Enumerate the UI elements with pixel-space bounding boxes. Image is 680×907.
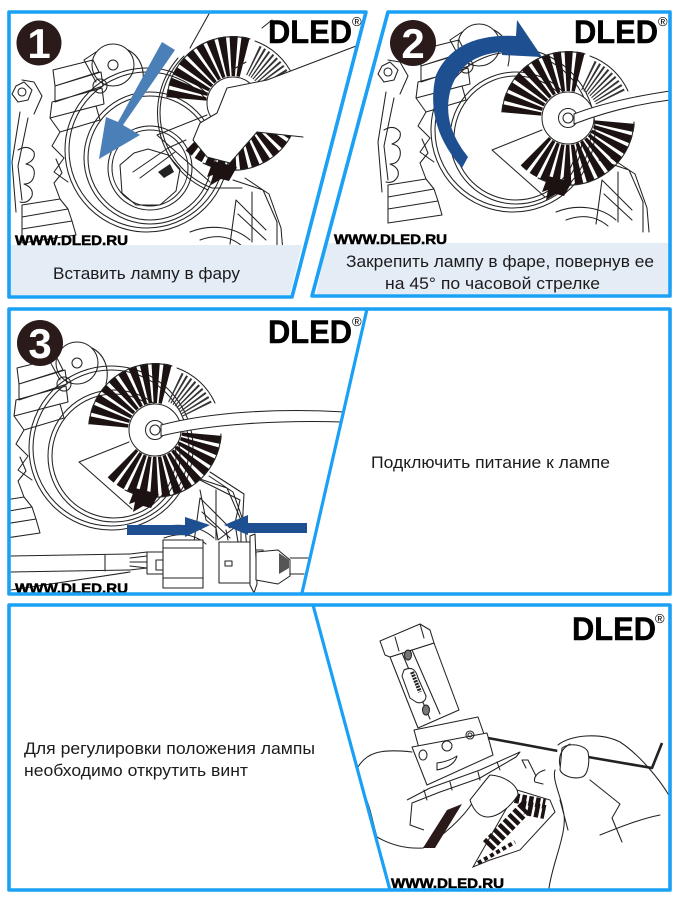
panel frame [312, 12, 670, 296]
step badge 1 [16, 20, 62, 67]
connector: right plug with cable [219, 534, 308, 593]
panel frame [9, 12, 366, 297]
arrow: insert lamp [99, 42, 175, 159]
description text: Подключить питание к лампе [371, 454, 610, 472]
logo: ® [655, 611, 665, 626]
panel frame [9, 605, 670, 890]
website label: WWW.DLED.RU [391, 876, 504, 891]
panel: step 4 [9, 605, 672, 891]
illustration: adjusting lamp with hex key [358, 624, 672, 888]
logo: ® [352, 14, 362, 29]
logo: ® [352, 314, 362, 329]
illustration: lamp turned in headlight [378, 24, 670, 232]
description text: Для регулировки положения лампы [24, 740, 315, 758]
fingers [470, 775, 518, 817]
caption text: Закрепить лампу в фаре, повернув ее [346, 253, 654, 271]
hex key: long end [588, 743, 662, 768]
step badge 1: 1 [27, 20, 51, 67]
arrow: from left to connector [127, 517, 210, 537]
logo: DLED [572, 611, 656, 647]
lamp base [412, 717, 493, 785]
diagonal divider [313, 605, 390, 890]
hex key: short end [488, 738, 558, 751]
website label: WWW.DLED.RU [334, 232, 447, 247]
connector: left plug [147, 540, 203, 588]
caption band [316, 243, 668, 294]
logo: DLED [268, 14, 352, 50]
panel: step 1 [9, 12, 367, 297]
diagonal divider [302, 309, 367, 593]
caption band [10, 245, 302, 295]
arrow: from right to connector [224, 515, 307, 535]
caption text [346, 253, 654, 293]
step badge 2: 2 [401, 20, 425, 67]
logo: DLED [268, 314, 352, 350]
left hand [358, 751, 473, 848]
panel: step 3 [0, 309, 670, 596]
description text [24, 740, 315, 780]
heatsink fragments [423, 790, 555, 867]
step badge 3: 3 [28, 320, 52, 367]
panel: step 2 [312, 12, 670, 296]
lamp head [380, 624, 459, 728]
logo: DLED [574, 14, 658, 50]
step badge 2 [390, 20, 436, 67]
caption text: на 45° по часовой стрелке [385, 275, 600, 293]
illustration: connecting power [0, 342, 345, 593]
right hand [557, 750, 558, 752]
panel frame [9, 309, 670, 594]
caption text: Вставить лампу в фару [53, 265, 241, 283]
website label: WWW.DLED.RU [15, 233, 128, 248]
website label: WWW.DLED.RU [15, 581, 128, 596]
logo: ® [658, 14, 668, 29]
lamp flange [407, 752, 520, 830]
description text: необходимо открутить винт [24, 762, 248, 780]
arrow: rotate clockwise [433, 20, 542, 168]
illustration: lamp entering headlight socket [12, 12, 364, 252]
step badge 3 [17, 320, 63, 367]
